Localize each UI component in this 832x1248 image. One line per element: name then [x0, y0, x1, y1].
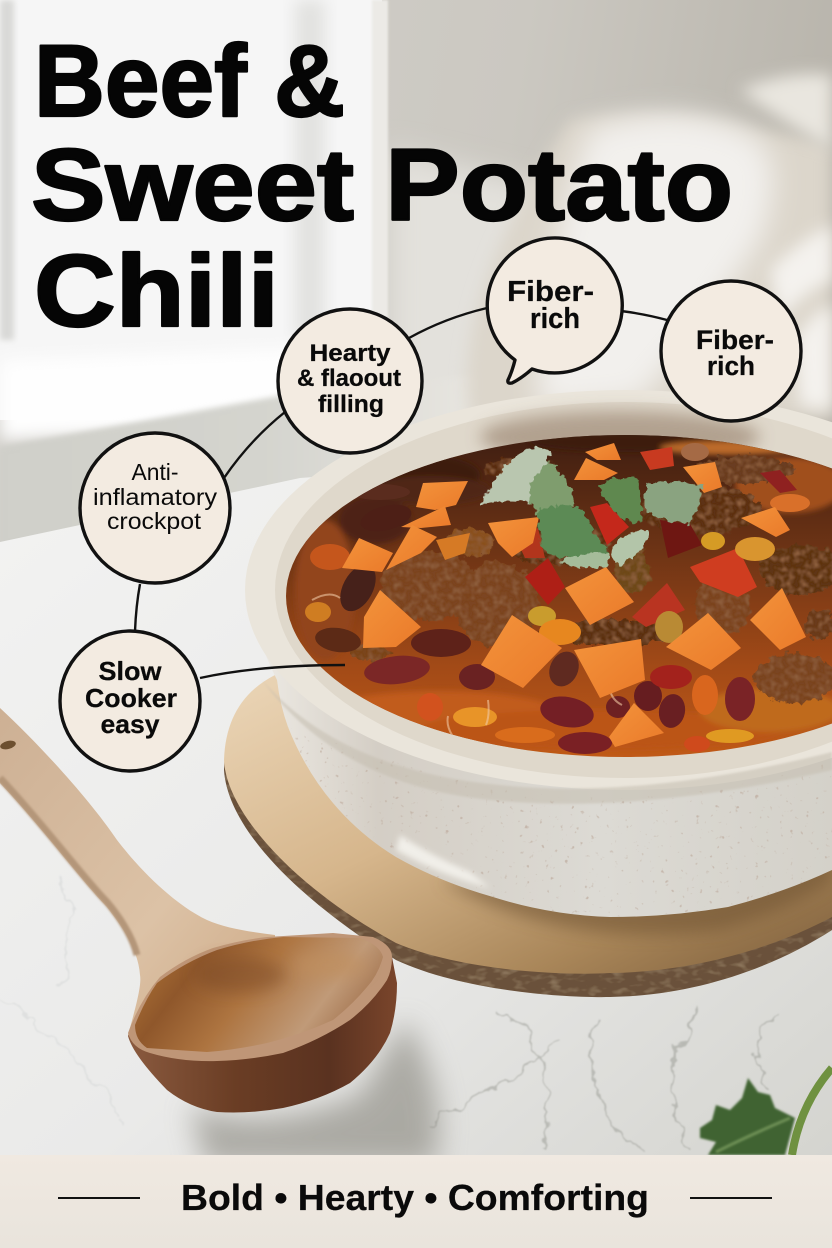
kidney beans — [314, 484, 755, 754]
badge: slow cooker easy: easy — [100, 709, 160, 739]
badge: fiber-rich: rich — [707, 351, 755, 381]
title: Beef & — [34, 24, 345, 138]
wooden board — [224, 672, 832, 997]
spoon inner bowl — [135, 937, 383, 1052]
badge: anti-inflammatory: crockpot — [107, 508, 202, 534]
badge: fiber-rich — [661, 281, 801, 421]
title — [31, 24, 733, 348]
ground beef — [350, 456, 832, 703]
badge: anti-inflammatory — [80, 433, 230, 583]
bowl — [245, 390, 832, 917]
badge: slow cooker easy: Slow — [98, 656, 162, 686]
tagline: Bold • Hearty • Comforting — [181, 1177, 649, 1218]
badge: hearty and filling: & flaoout — [297, 365, 401, 392]
footer band — [0, 1155, 832, 1248]
badge: fiber-rich speech bubble: Fiber- — [507, 276, 594, 308]
badge: hearty and filling — [278, 309, 422, 453]
badge: fiber-rich: Fiber- — [696, 325, 774, 355]
badge: hearty and filling: Hearty — [310, 340, 391, 367]
badge: slow cooker easy — [60, 631, 200, 771]
wooden spoon — [0, 708, 439, 1165]
badge: anti-inflammatory: Anti- — [132, 459, 178, 485]
badge: hearty and filling: filling — [318, 391, 384, 418]
spoon rim — [128, 933, 392, 1061]
corn and small vegetables — [305, 443, 810, 752]
title: Chili — [34, 234, 279, 348]
spoon handle — [0, 708, 275, 1035]
cilantro garnish — [480, 448, 702, 568]
spoon shadow — [190, 1020, 439, 1165]
badge: slow cooker easy: Cooker — [85, 683, 177, 713]
spoon outer bowl — [128, 957, 397, 1112]
badge: fiber-rich speech bubble — [487, 238, 622, 383]
title: Sweet Potato — [31, 128, 733, 242]
chili — [295, 432, 832, 754]
sweet potato cubes — [342, 443, 806, 747]
speckled glaze — [288, 727, 832, 917]
badge: anti-inflammatory: inflamatory — [93, 484, 218, 510]
parsley sprig — [700, 1068, 832, 1155]
badge: fiber-rich speech bubble: rich — [530, 303, 580, 335]
connector lines — [135, 308, 667, 678]
sauce patches — [295, 432, 832, 750]
red peppers — [515, 447, 797, 627]
sauce highlights — [312, 594, 622, 735]
